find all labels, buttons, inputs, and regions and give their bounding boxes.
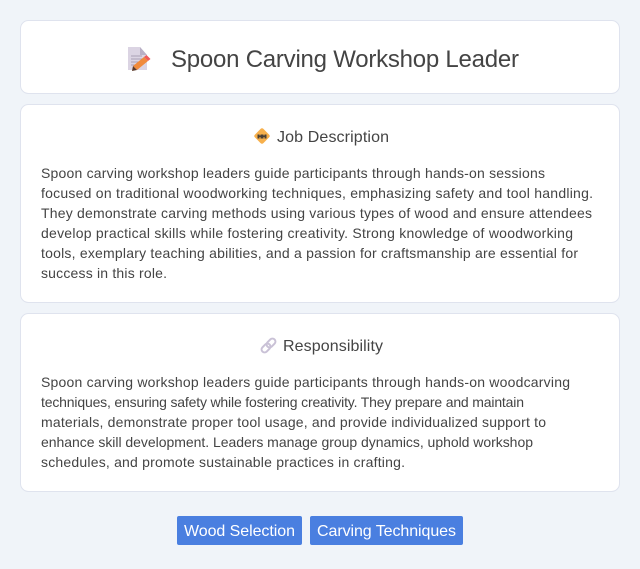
tag: wood selection: Wood Selection: [184, 523, 295, 540]
text block: responsibility: enhance skill development. Leaders manage group dynamics, uphold workshop: [41, 434, 533, 450]
text block: responsibility: schedules, and promote sustainable practices in crafting.: [41, 454, 405, 470]
text block: job description: [41, 165, 593, 281]
text block: job description: success in this role.: [41, 265, 167, 281]
title: Spoon Carving Workshop Leader: [171, 46, 519, 73]
panel: job description: [20, 104, 620, 302]
icon: chain link: [260, 337, 277, 354]
panel: title card: [20, 20, 620, 94]
text block: responsibility: Spoon carving workshop leaders guide participants through hands-on woodcarving: [41, 374, 570, 390]
text block: job description: tools, exemplary teaching abilities, and a passion for craftsmanship are essential for: [41, 245, 578, 261]
heading: responsibility: Responsibility: [283, 338, 383, 355]
icon: construction diamond: [254, 128, 270, 144]
tag: carving techniques: [310, 516, 463, 545]
heading: job description: Job Description: [277, 129, 389, 146]
text block: job description: Spoon carving workshop leaders guide participants through hands-on sessions: [41, 165, 545, 181]
text block: job description: focused on traditional woodworking techniques, emphasizing safety and tool handling.: [41, 185, 593, 201]
text block: responsibility: [41, 374, 570, 470]
text block: job description: They demonstrate carving methods using various types of wood and ensure attendees: [41, 205, 592, 221]
icon: document with pencil: [128, 47, 150, 71]
tag: wood selection: [177, 516, 302, 545]
panel: responsibility: [20, 314, 620, 492]
tag: carving techniques: Carving Techniques: [317, 523, 456, 540]
text block: responsibility: techniques, ensuring safety while fostering creativity. They prepare and maintain: [41, 394, 524, 410]
text block: responsibility: materials, demonstrate proper tool usage, and provide individualized support to: [41, 414, 546, 430]
text block: job description: develop practical skills while fostering creativity. Strong knowledge of woodworking: [41, 225, 573, 241]
